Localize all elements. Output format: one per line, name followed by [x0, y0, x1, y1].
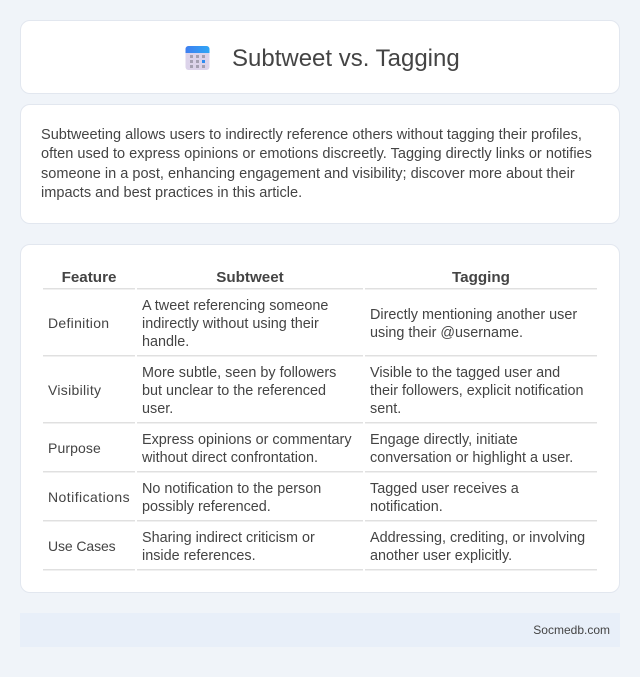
title: Subtweet vs. Tagging [232, 45, 460, 72]
table header: Feature [62, 269, 116, 286]
table row: Visibility: More subtle, seen by followers [142, 365, 336, 381]
text block: introduction: Subtweeting allows users to indirectly reference others without tagging their profiles, [41, 127, 582, 143]
table row: Purpose: Purpose [48, 440, 101, 456]
table row: Notifications: No notification to the person [142, 481, 321, 497]
text block: introduction [41, 127, 592, 201]
text block: introduction: someone in a post, enhancing engagement and visibility; discover more about their [41, 166, 575, 182]
icon: calendar [186, 46, 210, 70]
table row: Notifications: Tagged user receives a [370, 481, 519, 497]
text block: introduction: impacts and best practices in this article. [41, 185, 302, 201]
panel: title card [20, 20, 620, 94]
table row: Notifications: possibly referenced. [142, 499, 271, 515]
table row: Notifications: Notifications [48, 489, 130, 505]
table row: Visibility: their followers, explicit notification [370, 383, 584, 399]
table row: Visibility: Visibility [48, 382, 101, 398]
table row: Definition: handle. [142, 334, 189, 350]
table row: Use Cases: inside references. [142, 548, 256, 564]
table row: Definition: A tweet referencing someone [142, 298, 328, 314]
table row: Definition [43, 298, 597, 357]
table row: Definition: Directly mentioning another user [370, 307, 577, 323]
table header: Subtweet [216, 269, 284, 286]
table row: Visibility: user. [142, 401, 173, 417]
footer bar [20, 613, 620, 647]
table row: Visibility: sent. [370, 401, 401, 417]
table row: Use Cases: another user explicitly. [370, 548, 512, 564]
table row: Definition: Definition [48, 315, 109, 331]
table row: Purpose: without direct confrontation. [142, 450, 318, 466]
text block: introduction: often used to express opinions or emotions discreetly. Tagging directly links or notifies [41, 146, 592, 162]
panel: introduction [20, 104, 620, 224]
footer text: Socmedb.com [533, 623, 610, 637]
table header [43, 269, 597, 290]
table row: Definition: indirectly without using their [142, 316, 319, 332]
table header: Tagging [452, 269, 510, 286]
table row: Use Cases: Addressing, crediting, or involving [370, 530, 585, 546]
table row: Use Cases: Use Cases [48, 538, 116, 554]
table row: Definition: using their @username. [370, 325, 523, 341]
table row: Use Cases [43, 530, 597, 571]
table row: Notifications [43, 481, 597, 522]
table row: Visibility: Visible to the tagged user and [370, 365, 560, 381]
table row: Visibility: but unclear to the referenced [142, 383, 326, 399]
table row: Notifications: notification. [370, 499, 443, 515]
table row: Purpose: Express opinions or commentary [142, 432, 352, 448]
table row: Purpose: Engage directly, initiate [370, 432, 518, 448]
table row: Purpose [43, 432, 597, 473]
table row: Visibility [43, 365, 597, 424]
panel: comparison table [20, 244, 620, 593]
table row: Use Cases: Sharing indirect criticism or [142, 530, 315, 546]
table row: Purpose: conversation or highlight a user. [370, 450, 573, 466]
